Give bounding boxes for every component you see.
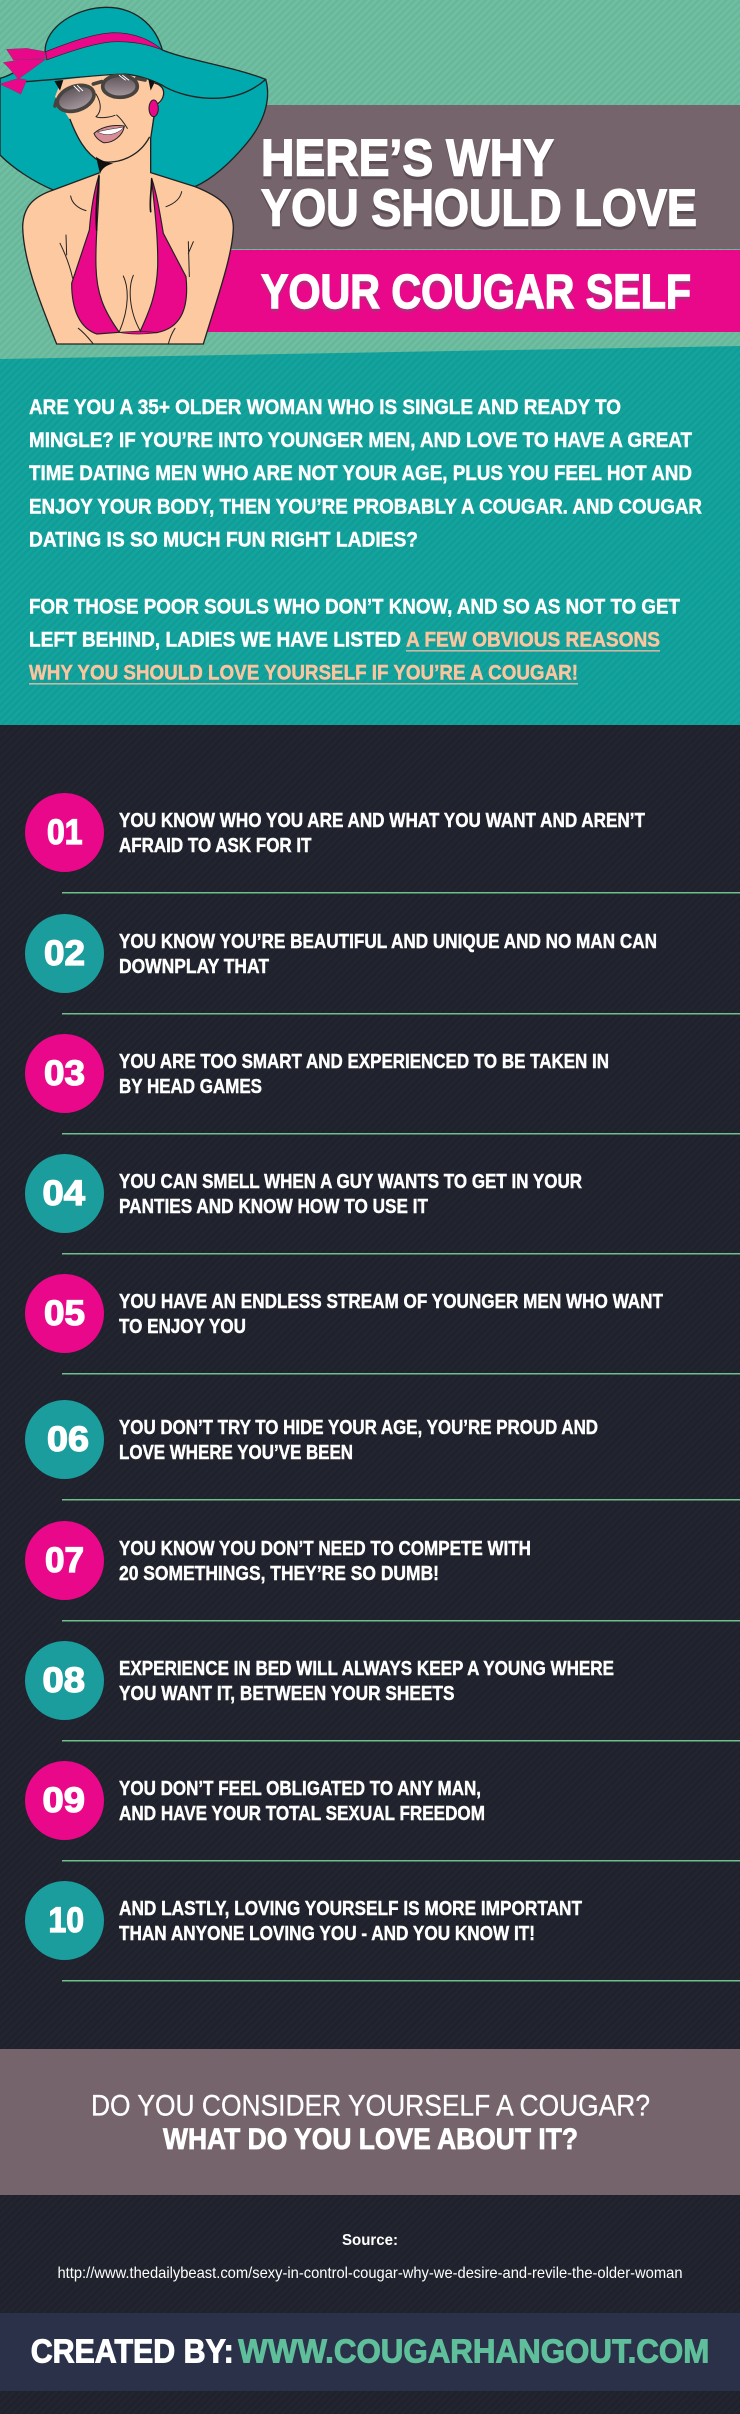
intro highlighted link <box>29 629 660 685</box>
intro paragraph 1 <box>29 396 702 552</box>
badge 02: 02 <box>44 934 85 973</box>
list item 10 <box>25 1881 582 1960</box>
text 01 <box>119 810 645 857</box>
text 08: EXPERIENCE IN BED WILL ALWAYS KEEP A YOUNG WHERE <box>119 1658 614 1680</box>
list item 04 <box>25 1154 582 1233</box>
text 02 <box>119 931 657 978</box>
list item 07 <box>25 1521 531 1600</box>
face and neck <box>55 75 164 175</box>
neck shadow <box>96 157 113 174</box>
badge 04: 04 <box>42 1174 86 1213</box>
list item 06 <box>25 1400 598 1479</box>
list item 02 <box>25 914 657 993</box>
text 05 <box>119 1291 663 1338</box>
badge 04 <box>25 1154 104 1233</box>
left bikini cup <box>72 175 119 334</box>
text 05: TO ENJOY YOU <box>119 1316 246 1338</box>
text 03: YOU ARE TOO SMART AND EXPERIENCED TO BE TAKEN IN <box>119 1051 609 1073</box>
text 10: THAN ANYONE LOVING YOU - AND YOU KNOW IT! <box>119 1923 535 1945</box>
text 08 <box>119 1658 614 1705</box>
text 06: YOU DON’T TRY TO HIDE YOUR AGE, YOU’RE PROUD AND <box>119 1417 598 1439</box>
text 02: DOWNPLAY THAT <box>119 956 269 978</box>
title line 1: HERE’S WHY <box>261 132 554 190</box>
text 06 <box>119 1417 598 1464</box>
text 03: BY HEAD GAMES <box>119 1076 262 1098</box>
title <box>261 130 697 322</box>
text 04 <box>119 1171 582 1218</box>
call to action line 1: DO YOU CONSIDER YOURSELF A COUGAR? <box>91 2090 650 2123</box>
header striped green background <box>0 0 740 365</box>
call to action line 2: WHAT DO YOU LOVE ABOUT IT? <box>163 2123 578 2156</box>
right bikini cup <box>140 178 187 333</box>
badge 06: 06 <box>47 1420 89 1459</box>
badge 01 <box>25 793 104 872</box>
source label: Source: <box>342 2232 398 2249</box>
list item 01 <box>25 793 645 872</box>
intro paragraph 2: FOR THOSE POOR SOULS WHO DON’T KNOW, AND SO AS NOT TO GET <box>29 595 680 618</box>
body <box>23 173 233 344</box>
intro paragraph 1: DATING IS SO MUCH FUN RIGHT LADIES? <box>29 529 418 552</box>
badge 10: 10 <box>48 1901 84 1940</box>
sunglasses <box>54 75 145 116</box>
list item 05 <box>25 1274 663 1353</box>
created by label: CREATED BY: <box>31 2333 234 2370</box>
hat brim and crown <box>0 7 268 190</box>
badge 06 <box>25 1400 104 1479</box>
intro panel <box>0 346 740 725</box>
badge 07 <box>25 1521 104 1600</box>
badge 10 <box>25 1881 104 1960</box>
header banner: grey <box>150 105 740 249</box>
text 07: 20 SOMETHINGS, THEY’RE SO DUMB! <box>119 1563 439 1585</box>
intro highlighted link: A FEW OBVIOUS REASONS <box>406 629 660 652</box>
text 05: YOU HAVE AN ENDLESS STREAM OF YOUNGER MEN WHO WANT <box>119 1291 663 1313</box>
text 10: AND LASTLY, LOVING YOURSELF IS MORE IMPORTANT <box>119 1898 582 1920</box>
text 02: YOU KNOW YOU’RE BEAUTIFUL AND UNIQUE AND NO MAN CAN <box>119 931 657 953</box>
text 07: YOU KNOW YOU DON’T NEED TO COMPETE WITH <box>119 1538 531 1560</box>
badge 07: 07 <box>45 1541 84 1580</box>
text 04: PANTIES AND KNOW HOW TO USE IT <box>119 1196 428 1218</box>
website address: WWW.COUGARHANGOUT.COM <box>238 2333 709 2370</box>
text 08: YOU WANT IT, BETWEEN YOUR SHEETS <box>119 1683 454 1705</box>
under brim line <box>25 74 266 98</box>
text 10 <box>119 1898 582 1945</box>
footer credit bar <box>0 2313 740 2391</box>
badge 05: 05 <box>44 1294 85 1333</box>
bow <box>0 48 46 94</box>
text 01: AFRAID TO ASK FOR IT <box>119 835 312 857</box>
badge 09: 09 <box>42 1781 85 1820</box>
badge 09 <box>25 1761 104 1840</box>
text 09: YOU DON’T FEEL OBLIGATED TO ANY MAN, <box>119 1778 481 1800</box>
intro paragraph 1: ARE YOU A 35+ OLDER WOMAN WHO IS SINGLE AND READY TO <box>29 396 621 419</box>
source url: http://www.thedailybeast.com/sexy-in-control-cougar-why-we-desire-and-revile-the-older-woman <box>58 2265 682 2282</box>
intro highlighted link: WHY YOU SHOULD LOVE YOURSELF IF YOU’RE A COUGAR! <box>29 661 578 684</box>
illustration: woman in sun hat <box>0 7 268 344</box>
badge 08: 08 <box>42 1661 85 1700</box>
badge 01: 01 <box>47 813 82 852</box>
text 04: YOU CAN SMELL WHEN A GUY WANTS TO GET IN YOUR <box>119 1171 582 1193</box>
hair <box>54 79 155 91</box>
mouth <box>94 126 124 143</box>
nose <box>96 94 127 128</box>
earring <box>149 100 158 117</box>
hat band <box>46 33 162 60</box>
text 07 <box>119 1538 531 1585</box>
badge 08 <box>25 1641 104 1720</box>
text 01: YOU KNOW WHO YOU ARE AND WHAT YOU WANT AND AREN’T <box>119 810 645 832</box>
text 03 <box>119 1051 609 1098</box>
body lines <box>60 192 193 344</box>
title line 1: HERE’S WHY <box>261 130 554 188</box>
text 06: LOVE WHERE YOU’VE BEEN <box>119 1442 353 1464</box>
badge 05 <box>25 1274 104 1353</box>
badge 03: 03 <box>44 1054 85 1093</box>
badge 03 <box>25 1034 104 1113</box>
text 09 <box>119 1778 485 1825</box>
list item 08 <box>25 1641 614 1720</box>
list item 09 <box>25 1761 485 1840</box>
list item 03 <box>25 1034 609 1113</box>
badge 02 <box>25 914 104 993</box>
intro paragraph 2: LEFT BEHIND, LADIES WE HAVE LISTED <box>29 629 401 652</box>
call to action panel <box>0 2049 740 2195</box>
intro paragraph 2 <box>29 595 680 652</box>
text 09: AND HAVE YOUR TOTAL SEXUAL FREEDOM <box>119 1803 485 1825</box>
header banner: pink <box>150 250 740 332</box>
